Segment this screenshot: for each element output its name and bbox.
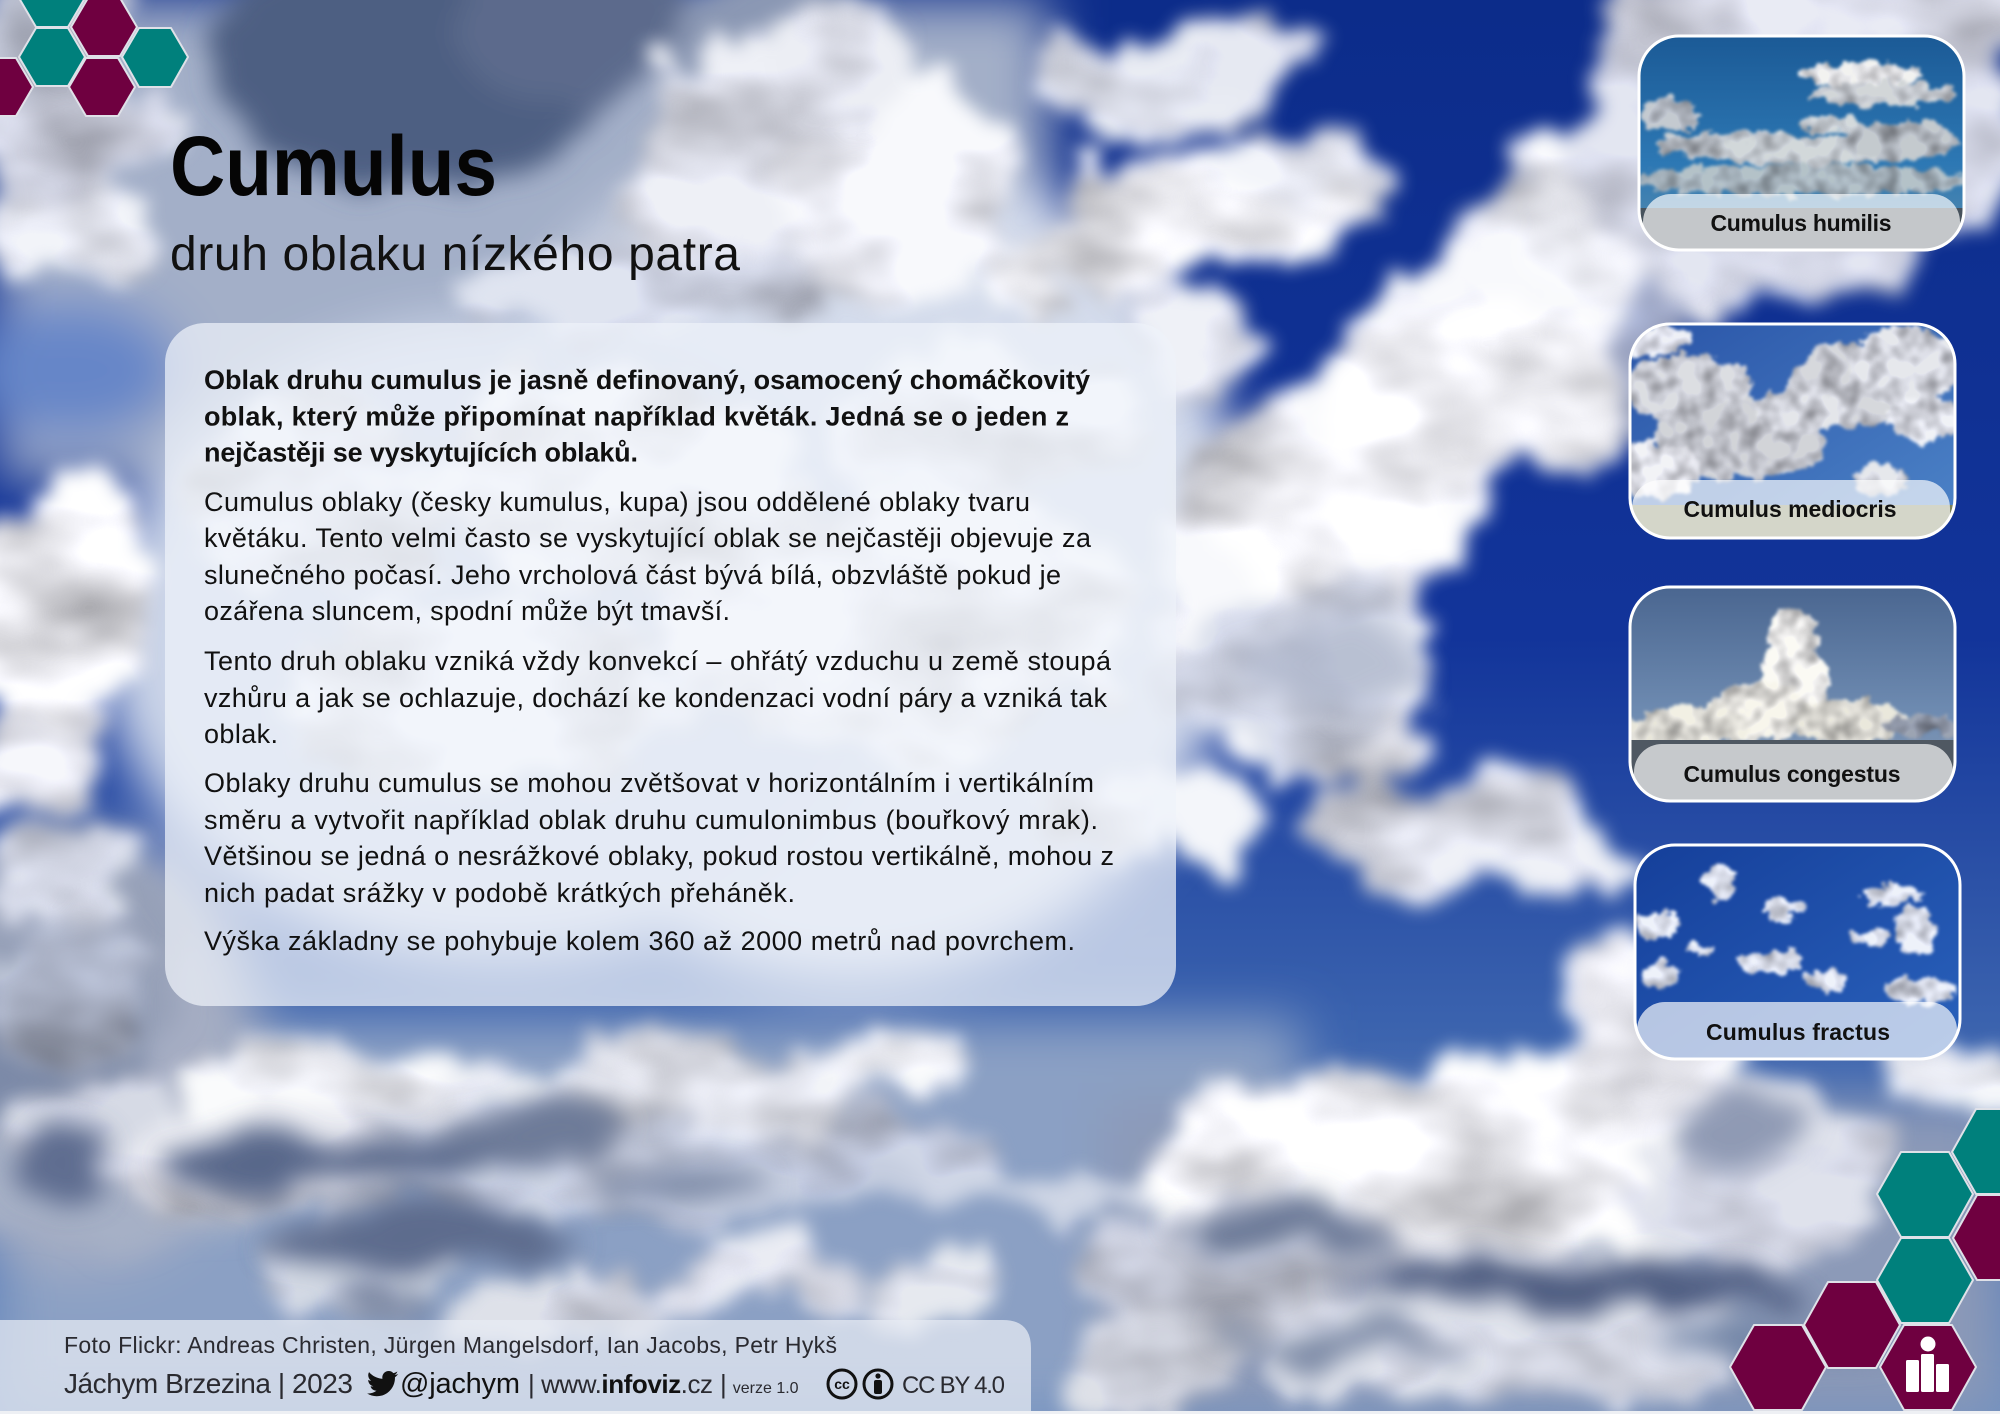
separator and version: | verze 1.0 xyxy=(720,1369,799,1399)
caption bar: Cumulus congestus xyxy=(1684,761,1900,787)
icon: infographic person with bars xyxy=(1906,1336,1949,1392)
paragraph: growth: nich padat srážky v podobě krátkých přeháněk. xyxy=(204,878,795,908)
paragraph: formation: oblak. xyxy=(204,719,278,749)
photo credit: Foto Flickr: Andreas Christen, Jürgen Mangelsdorf, Ian Jacobs, Petr Hykš xyxy=(64,1332,837,1358)
paragraph: appearance: ozářena sluncem, spodní může být tmavší. xyxy=(204,596,730,626)
caption bar xyxy=(1637,1002,1957,1062)
title: Cumulus xyxy=(170,119,497,213)
panel: description xyxy=(165,323,1176,1006)
subtitle: druh oblaku nízkého patra xyxy=(170,228,740,281)
website: | www.infoviz.cz xyxy=(528,1369,713,1399)
caption bar xyxy=(1632,480,1950,542)
footer panel: credits xyxy=(0,1320,1031,1411)
hexagon cluster: top left xyxy=(0,0,188,116)
hexagon cluster: bottom right with logo xyxy=(1730,1109,2000,1410)
author and year: Jáchym Brzezina | 2023 xyxy=(64,1368,353,1399)
paragraph: growth xyxy=(204,768,1114,908)
paragraph: formation: Tento druh oblaku vzniká vždy konvekcí – ohřátý vzduchu u země stoupá xyxy=(204,646,1112,676)
license: CC BY 4.0 xyxy=(902,1372,1005,1399)
intro paragraph in bold: nejčastěji se vyskytujících oblaků. xyxy=(204,438,638,468)
icon: attribution xyxy=(864,1370,892,1398)
paragraph: growth: Většinou se jedná o nesrážkové oblaky, pokud rostou vertikálně, mohou z xyxy=(204,841,1114,871)
paragraph: growth: Oblaky druhu cumulus se mohou zvětšovat v horizontálním i vertikálním xyxy=(204,768,1094,798)
caption bar xyxy=(1643,194,1960,254)
caption bar: Cumulus fractus xyxy=(1706,1019,1890,1045)
paragraph: growth: směru a vytvořit například oblak druhu cumulonimbus (bouřkový mrak). xyxy=(204,805,1098,835)
intro paragraph in bold xyxy=(204,365,1090,468)
photo card: Cumulus fractus xyxy=(1635,845,1960,1062)
paragraph: base height: Výška základny se pohybuje kolem 360 až 2000 metrů nad povrchem. xyxy=(204,926,1075,956)
paragraph: appearance xyxy=(204,487,1092,626)
paragraph: appearance: slunečného počasí. Jeho vrcholová část bývá bílá, obzvláště pokud je xyxy=(204,560,1061,590)
paragraph: formation xyxy=(204,646,1112,749)
paragraph: appearance: květáku. Tento velmi často se vyskytující oblak se nejčastěji objevuje za xyxy=(204,523,1092,553)
intro paragraph in bold: oblak, který může připomínat například květák. Jedná se o jeden z xyxy=(204,402,1069,432)
paragraph: formation: vzhůru a jak se ochlazuje, dochází ke kondenzaci vodní páry a vzniká tak xyxy=(204,683,1108,713)
icon: twitter bird xyxy=(367,1371,398,1396)
twitter handle: @jachym xyxy=(400,1368,520,1400)
intro paragraph in bold: Oblak druhu cumulus je jasně definovaný, osamocený chomáčkovitý xyxy=(204,365,1090,395)
caption bar: Cumulus humilis xyxy=(1710,210,1892,236)
photo card: Cumulus mediocris xyxy=(1628,322,1956,540)
paragraph: appearance: Cumulus oblaky (česky kumulus, kupa) jsou oddělené oblaky tvaru xyxy=(204,487,1030,517)
caption bar: Cumulus mediocris xyxy=(1684,496,1896,522)
icon: creative commons: cc xyxy=(834,1376,850,1392)
caption bar xyxy=(1634,744,1953,804)
photo card: Cumulus congestus xyxy=(1617,587,1960,804)
icon: creative commons xyxy=(828,1370,856,1398)
photo card: Cumulus humilis xyxy=(1630,36,1970,254)
